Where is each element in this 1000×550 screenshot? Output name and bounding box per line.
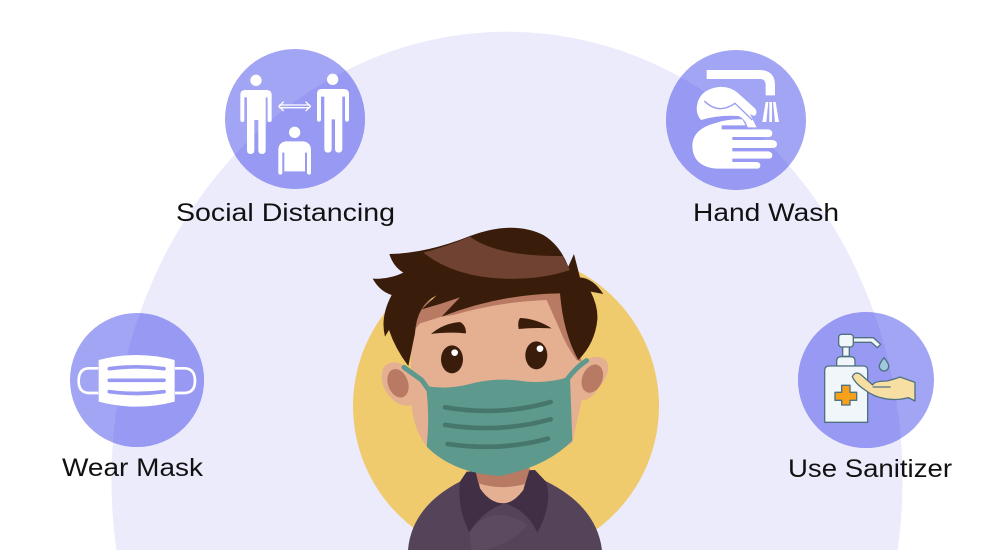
eyebrows: [431, 322, 466, 334]
label: use sanitizer: Use Sanitizer: [788, 455, 952, 483]
background dome: [111, 32, 902, 550]
label: wear mask: Wear Mask: [62, 454, 204, 482]
shirt: [408, 477, 602, 550]
collar: [459, 470, 548, 533]
icon: social distancing: [225, 49, 365, 189]
mask: [426, 377, 572, 476]
eyes: [441, 345, 463, 373]
label: social distancing: Social Distancing: [176, 199, 395, 227]
icon: use sanitizer: [798, 312, 934, 448]
ears: [382, 357, 608, 406]
character: masked man: [373, 228, 608, 550]
mask straps: [404, 361, 587, 392]
yellow circle: [353, 253, 659, 550]
icon: wear mask: [70, 313, 204, 447]
label: hand wash: Hand Wash: [693, 199, 839, 227]
icon: hand wash: [666, 50, 806, 190]
neck: [475, 467, 530, 503]
face: [410, 300, 582, 476]
hair highlight: [423, 237, 570, 279]
hair: [373, 228, 603, 366]
forehead shadow: [413, 290, 582, 362]
mask pleats: [445, 402, 551, 447]
